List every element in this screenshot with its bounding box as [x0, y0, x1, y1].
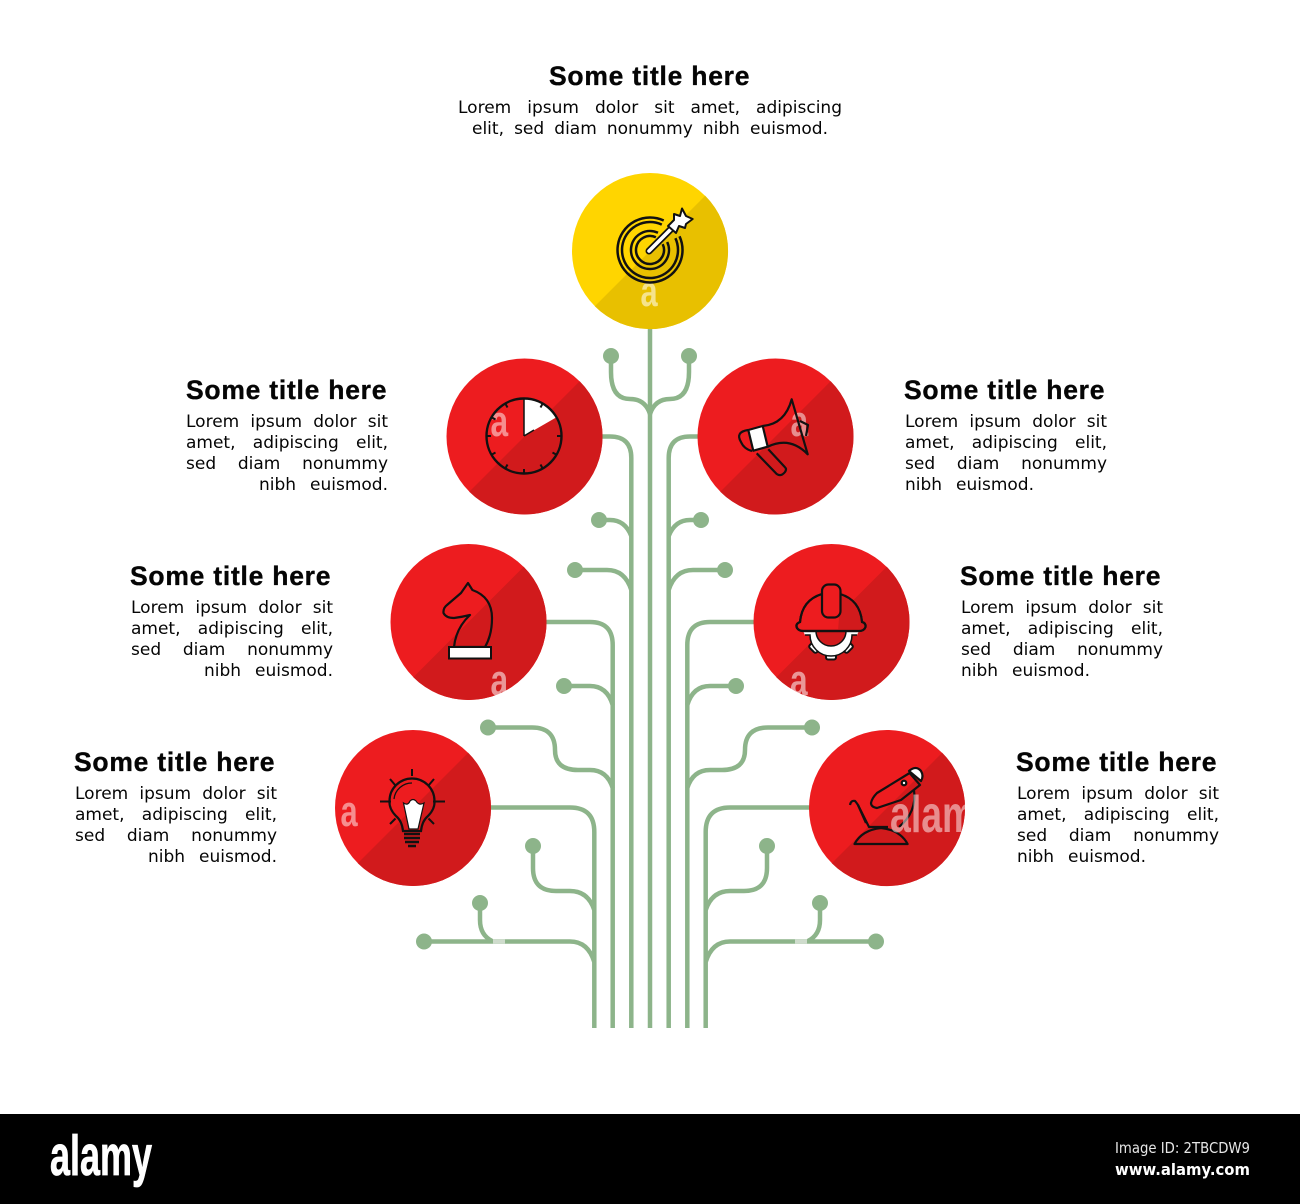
red circle: chess knight: a: [490, 656, 509, 705]
body text: sed diam nonummy: [186, 454, 388, 474]
body text: Lorem ipsum dolor sit: [905, 412, 1107, 432]
body text: nibh euismod.: [1017, 847, 1146, 867]
footer bar: alamy: [50, 1124, 152, 1188]
title: Some title here: [74, 747, 275, 777]
body text: amet, adipiscing elit,: [186, 433, 388, 453]
red circle: helmet and gear: [754, 544, 910, 705]
title: Some title here: [186, 375, 387, 405]
body text: Lorem ipsum dolor sit: [1017, 784, 1219, 804]
text block: left 2: [130, 561, 333, 681]
body text: amet, adipiscing elit,: [1017, 805, 1219, 825]
yellow circle: target: a: [640, 268, 658, 316]
footer bar: [0, 1114, 1300, 1204]
title: Some title here: [549, 61, 750, 91]
body text: sed diam nonummy: [75, 826, 277, 846]
body text: Lorem ipsum dolor sit amet, adipiscing: [458, 98, 842, 118]
text block: right 1: [904, 375, 1107, 495]
text block: right 2: [960, 561, 1163, 681]
body text: nibh euismod.: [204, 661, 333, 681]
title: Some title here: [130, 561, 331, 591]
body text: sed diam nonummy: [961, 640, 1163, 660]
body text: amet, adipiscing elit,: [75, 805, 277, 825]
yellow circle: target: [572, 173, 728, 329]
red circle: megaphone: [698, 358, 854, 515]
body text: Lorem ipsum dolor sit: [186, 412, 388, 432]
left branches: [416, 348, 650, 1028]
body text: Lorem ipsum dolor sit: [131, 598, 333, 618]
body text: nibh euismod.: [961, 661, 1090, 681]
title: Some title here: [904, 375, 1105, 405]
red circle: helmet and gear: a: [790, 656, 808, 705]
body text: sed diam nonummy: [1017, 826, 1219, 846]
red circle: light bulb: a: [340, 788, 358, 836]
body text: nibh euismod.: [148, 847, 277, 867]
body text: sed diam nonummy: [905, 454, 1107, 474]
red circle: clock: [446, 358, 603, 515]
body text: [1017, 784, 1219, 867]
text block: top: [458, 61, 842, 139]
text block: right 3: [1016, 747, 1219, 867]
body text: amet, adipiscing elit,: [131, 619, 333, 639]
body text: [905, 412, 1107, 495]
body text: elit, sed diam nonummy nibh euismod.: [472, 119, 828, 139]
body text: [186, 412, 388, 495]
tree trunk center line: [648, 328, 652, 1028]
title: Some title here: [960, 561, 1161, 591]
body text: nibh euismod.: [905, 475, 1034, 495]
red circle: light bulb: [335, 730, 491, 886]
footer bar: Image ID: 2TBCDW9: [1115, 1139, 1250, 1157]
body text: Lorem ipsum dolor sit: [961, 598, 1163, 618]
body text: [131, 598, 333, 681]
red circle: clock: a: [490, 397, 509, 446]
red circle: microscope: [809, 730, 975, 886]
body text: amet, adipiscing elit,: [961, 619, 1163, 639]
body text: [75, 784, 277, 867]
text block: left 1: [186, 375, 388, 495]
footer bar: www.alamy.com: [1115, 1160, 1250, 1179]
right branches: [650, 348, 884, 1028]
body text: Lorem ipsum dolor sit: [75, 784, 277, 804]
text block: left 3: [74, 747, 277, 867]
red circle: microscope: alam: [890, 785, 975, 843]
body text: nibh euismod.: [259, 475, 388, 495]
red circle: chess knight: [390, 544, 547, 705]
body text: sed diam nonummy: [131, 640, 333, 660]
red circle: megaphone: a: [790, 397, 809, 446]
body text: [458, 98, 842, 139]
body text: amet, adipiscing elit,: [905, 433, 1107, 453]
body text: [961, 598, 1163, 681]
title: Some title here: [1016, 747, 1217, 777]
